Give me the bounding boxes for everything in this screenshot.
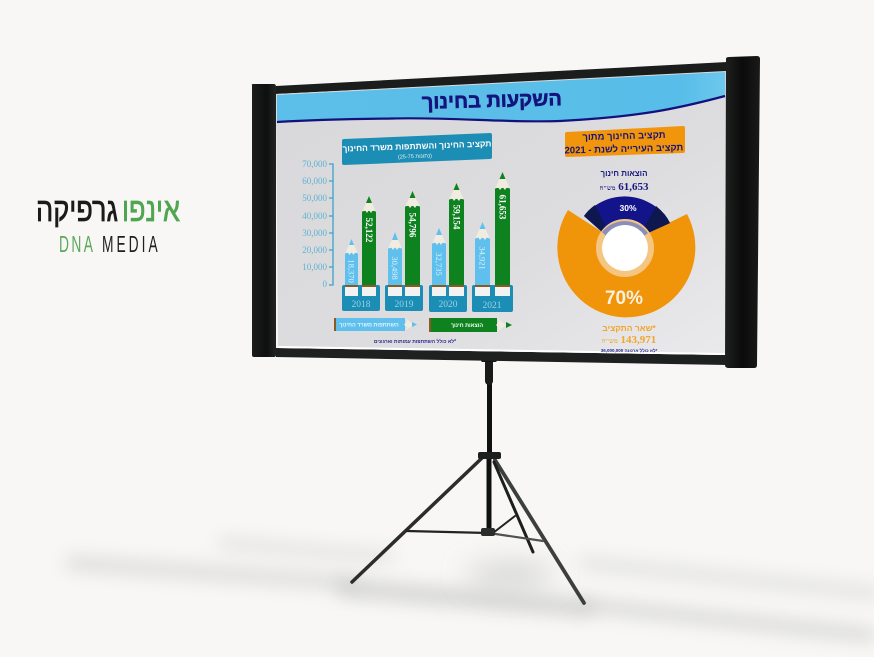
pencil 2021 education: 61,653 (498, 195, 508, 220)
logo: DNA MEDIA: MEDIA (102, 233, 161, 258)
left end cap (252, 84, 276, 357)
education label (600, 169, 649, 193)
pencil 2021 education (495, 172, 510, 285)
logo: DNA MEDIA (59, 233, 161, 258)
panel: bar chart (302, 133, 513, 345)
y axis: 40,000 (302, 211, 328, 221)
orange heading box (564, 126, 685, 157)
logo (36, 191, 180, 258)
logo: DNA MEDIA: DNA (59, 233, 95, 258)
navy slice (584, 196, 670, 233)
orange inner ring (599, 222, 651, 274)
education label: הוצאות חינוך (600, 169, 648, 178)
pencil 2020 participation (432, 228, 446, 285)
y axis: 20,000 (302, 245, 328, 255)
year labels: 2019 (394, 300, 414, 310)
donut (557, 196, 695, 317)
legend: education pencil (429, 318, 512, 332)
pencil 2021 participation (475, 222, 490, 285)
pencil 2018 education (362, 196, 376, 285)
centre hole (602, 225, 648, 271)
pencil erasers (345, 285, 510, 296)
orange heading box: תקציב העירייה לשנת - 2021 (564, 142, 684, 157)
title: השקעות בחינוך (422, 88, 562, 114)
education label: 61,653 מש"ח (600, 181, 649, 193)
legend: education pencil: הוצאות חינוך (451, 323, 483, 329)
pencil 2020 education (449, 183, 464, 285)
legend: participation pencil: השתתפות משרד החינוך (339, 322, 399, 328)
rest of budget label: *שאר התקציב (602, 323, 656, 333)
pencil 2018 education: 52,122 (364, 218, 374, 243)
pencil 2019 participation (388, 232, 402, 285)
y axis: 0 (322, 279, 328, 289)
floor shadows (72, 543, 874, 635)
year labels: 2021 (482, 301, 502, 311)
panel: donut chart (557, 126, 695, 353)
y axis: 10,000 (302, 262, 328, 272)
right end cap (725, 56, 760, 368)
tripod stand (352, 357, 584, 603)
rest of budget label: 143,971 מש"ח (602, 334, 656, 346)
year plates (342, 285, 513, 312)
chart heading box (342, 133, 492, 165)
year labels (352, 300, 502, 311)
pencil 2021 participation: 34,921 (478, 246, 488, 270)
y axis: 60,000 (302, 176, 328, 186)
y axis (302, 159, 333, 289)
orange slice (557, 210, 695, 317)
chart heading box: (נתונות 25-75) (398, 153, 432, 161)
y axis: 70,000 (302, 159, 328, 169)
pencil 2020 participation: 32,735 (434, 252, 444, 276)
logo: Hebrew wordmark: גרפיקה (36, 191, 118, 228)
donut footnote: *לא כולל ארנונה 36,000,000 (601, 348, 658, 353)
year labels: 2020 (438, 300, 458, 310)
projection screen frame (252, 56, 760, 368)
pencil 2020 education: 59,154 (452, 205, 462, 230)
navy inner ring (602, 221, 648, 236)
30 percent label: 30% (619, 203, 637, 213)
y axis: 30,000 (302, 228, 328, 238)
pencil 2019 participation: 30,498 (390, 256, 400, 280)
logo: Hebrew wordmark: אינפו (122, 191, 180, 228)
pencil 2018 participation (345, 239, 358, 285)
orange heading box: תקציב החינוך מתוך (582, 130, 666, 143)
chart heading box: תקציב החינוך והשתתפות משרד החינוך (342, 138, 492, 154)
pencil 2019 education: 54,796 (408, 213, 418, 238)
year labels: 2018 (352, 300, 371, 310)
pencil 2018 participation: 18,370 (346, 259, 356, 283)
rest of budget label (602, 323, 656, 346)
y axis: 50,000 (302, 193, 328, 203)
header band (277, 72, 725, 122)
legend: participation pencil (334, 318, 417, 331)
70 percent label: 70% (605, 288, 643, 309)
chart footnote: *לא כולל השתתפות עמותות וארגונים (374, 338, 456, 345)
screen surface (276, 71, 726, 355)
logo: Hebrew wordmark (36, 191, 180, 228)
pencil 2019 education (405, 191, 420, 285)
